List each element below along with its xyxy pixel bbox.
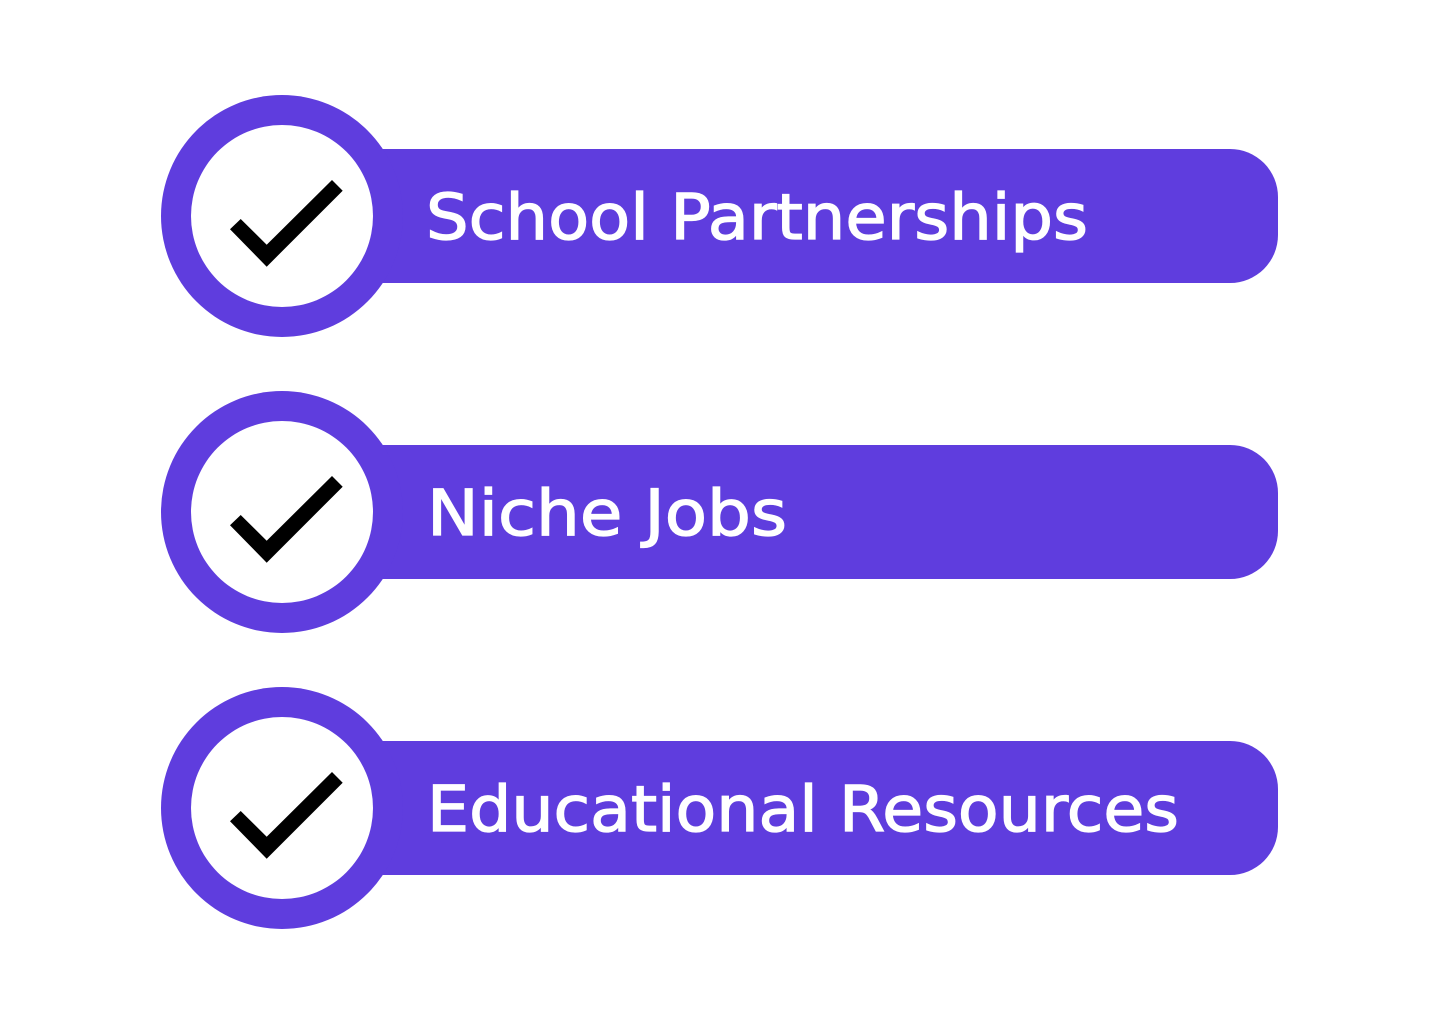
circle badge interior (191, 717, 373, 899)
banner bar (282, 149, 1278, 283)
circle badge interior (191, 125, 373, 307)
item: Educational Resources (161, 687, 1278, 929)
banner bar (282, 741, 1278, 875)
icon: check mark (230, 476, 343, 563)
icon: check mark (230, 180, 343, 267)
banner bar (282, 445, 1278, 579)
label: Educational Resources (427, 773, 1179, 846)
circle badge interior (191, 421, 373, 603)
circle badge ring (161, 95, 403, 337)
item: School Partnerships (161, 95, 1278, 337)
item: Niche Jobs (161, 391, 1278, 633)
label: Niche Jobs (427, 477, 787, 550)
label: School Partnerships (426, 181, 1088, 254)
icon: check mark (230, 772, 343, 859)
circle badge ring (161, 687, 403, 929)
circle badge ring (161, 391, 403, 633)
